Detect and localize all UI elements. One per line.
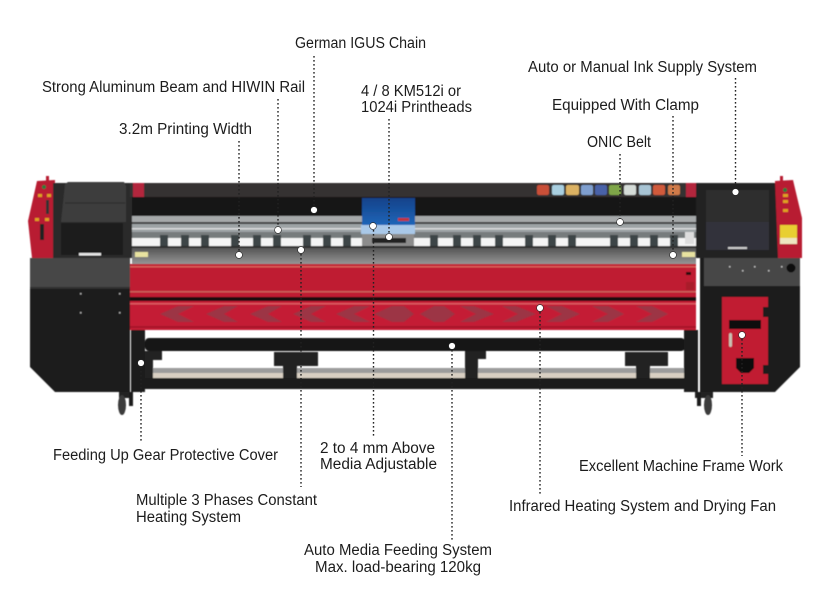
callout: 3.2m Printing Width [119,121,252,258]
callout: Feeding Up Gear Protective Cover [53,360,278,464]
callout: Infrared Heating System and Drying Fan: Infrared Heating System and Drying Fan [509,498,776,515]
media feeding roller assembly [131,330,698,392]
callout: printheads [361,83,472,240]
callout: printheads: 1024i Printheads [361,99,472,116]
printer machine [28,176,802,415]
left black housing [53,182,132,258]
callout: auto media feeding system [304,343,492,576]
callout: media height adjustable [320,223,437,473]
right lower frame [700,258,800,392]
callout: German IGUS Chain: German IGUS Chain [295,35,426,52]
left red control panel [28,176,55,258]
callout: Excellent Machine Frame Work [579,332,783,475]
carriage bay [132,197,696,238]
callout: Auto or Manual Ink Supply System [528,59,757,195]
upper red panel [130,264,696,302]
callout: auto media feeding system: Auto Media Feeding System [304,542,492,559]
media clamps strip [132,232,696,248]
right black housing [696,183,778,258]
callout: constant heating system: Multiple 3 Phases Constant [136,492,318,509]
callout: German IGUS Chain [295,35,426,213]
callout: printheads: 4 / 8 KM512i or [361,83,461,100]
callout: Strong Aluminum Beam and HIWIN Rail: Strong Aluminum Beam and HIWIN Rail [42,79,305,96]
callout: media height adjustable: Media Adjustable [320,456,437,473]
callout: Feeding Up Gear Protective Cover: Feeding Up Gear Protective Cover [53,447,278,464]
right caster wheel [695,392,713,415]
callout: constant heating system: Heating System [136,509,241,526]
red machine door [722,297,770,384]
callout: ONIC Belt: ONIC Belt [587,134,652,151]
callout: Equipped With Clamp: Equipped With Clamp [552,97,699,114]
callout: media height adjustable: 2 to 4 mm Above [320,440,435,457]
callout: Strong Aluminum Beam and HIWIN Rail [42,79,305,233]
top bar with media icons [130,183,696,197]
left lower frame [30,258,130,392]
blue print carriage [361,198,415,246]
lower red panel with chevrons [130,301,696,330]
callout: 3.2m Printing Width: 3.2m Printing Width [119,121,252,138]
callout: Equipped With Clamp [552,97,699,258]
callout: Auto or Manual Ink Supply System: Auto or Manual Ink Supply System [528,59,757,76]
callout: Excellent Machine Frame Work: Excellent Machine Frame Work [579,458,783,475]
right red panel [775,176,802,258]
gray beam [132,248,696,265]
callout: auto media feeding system: Max. load-bearing 120kg [315,559,481,576]
callout: ONIC Belt [587,134,652,225]
callout: Infrared Heating System and Drying Fan [509,305,776,515]
left caster wheel [118,392,133,415]
callout: constant heating system [136,247,318,526]
